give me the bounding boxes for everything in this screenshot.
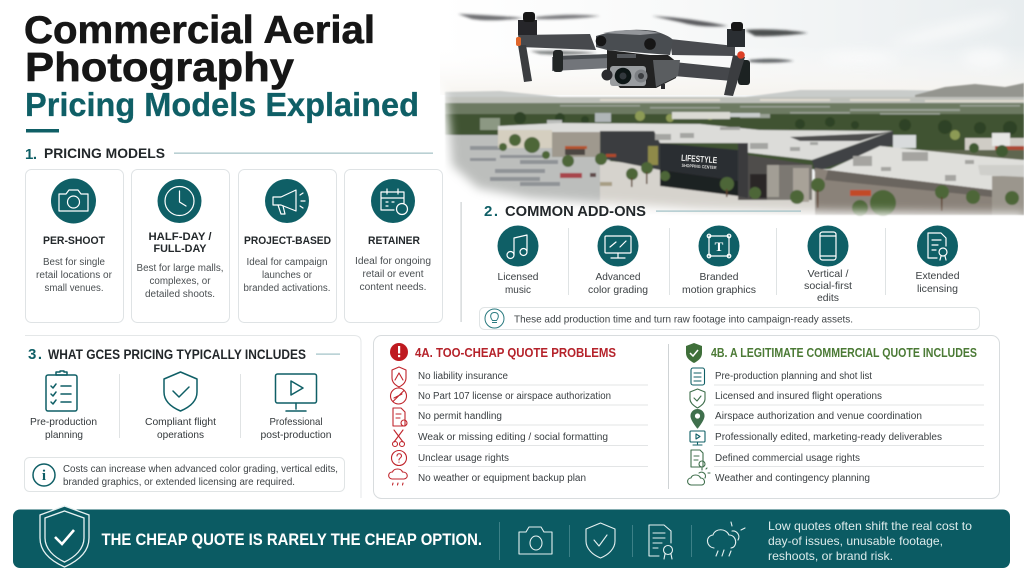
card: half-day / full-day: HALF-DAY / <box>148 231 212 243</box>
distant buildings <box>672 112 730 119</box>
column 4A: too-cheap quote problems: No liability insurance <box>418 371 508 382</box>
card: half-day / full-day: complexes, or <box>150 276 211 287</box>
column 4A: too-cheap quote problems: No Part 107 license or airspace authorization <box>418 391 611 402</box>
card: per-shoot: Best for single <box>43 257 105 268</box>
add-on: advanced color grading: color grading <box>588 284 648 296</box>
column 4B: legitimate quote includes: Airspace authorization and venue coordination <box>715 411 922 422</box>
add-on: licensed music <box>498 226 539 296</box>
column 4A: too-cheap quote problems: Weak or missing editing / social formatting <box>418 432 608 443</box>
photo sign text: SHOPPING CENTER <box>681 163 717 170</box>
icon: banner document <box>649 525 672 559</box>
heading: 3. what GCES pricing includes: WHAT GCES PRICING TYPICALLY INCLUDES <box>48 347 306 362</box>
item: compliant flight operations: operations <box>157 430 204 441</box>
heading: 2. common add-ons: COMMON ADD-ONS <box>505 204 646 220</box>
callout: cost note: i <box>42 468 46 484</box>
add-on: extended licensing: licensing <box>917 283 958 295</box>
icon: banner weather <box>707 522 745 556</box>
icon: banner shield <box>40 506 89 567</box>
icon: red alert <box>390 343 408 361</box>
card: per-shoot: PER-SHOOT <box>43 235 105 247</box>
icons: legitimate list <box>688 368 710 485</box>
icon: green shield check <box>686 343 702 363</box>
panel: what GCES pricing includes <box>24 336 361 498</box>
add-on: branded motion graphics: motion graphics <box>682 284 756 296</box>
callout: add-ons note: These add production time and turn raw footage into campaign-ready assets. <box>514 314 853 326</box>
add-on: extended licensing: Extended <box>916 270 960 282</box>
banner: cheap quote takeaway: THE CHEAP QUOTE IS RARELY THE CHEAP OPTION. <box>102 530 482 549</box>
panel: pricing models cards <box>26 170 442 322</box>
card: retainer: content needs. <box>360 282 426 293</box>
right building <box>828 146 1024 192</box>
card: retainer: retail or event <box>362 269 424 280</box>
text: banner explanation: Low quotes often shift the real cost to <box>768 519 972 533</box>
card: retainer: RETAINER <box>368 235 420 247</box>
text: banner explanation: reshoots, or brand risk. <box>768 549 893 563</box>
heading: 1. pricing models: PRICING MODELS <box>44 145 165 161</box>
panel: quote comparison <box>374 336 1000 498</box>
column 4A: too-cheap quote problems: No permit handling <box>418 411 502 422</box>
column 4B: legitimate quote includes: Professionally edited, marketing-ready deliverables <box>715 432 942 443</box>
column 4A: too-cheap quote problems <box>389 343 648 485</box>
heading: 3. what GCES pricing includes: 3. <box>28 346 42 363</box>
add-on: vertical social-first edits: edits <box>817 292 839 304</box>
card: half-day / full-day: FULL-DAY <box>154 243 207 255</box>
item: compliant flight operations: Compliant flight <box>145 417 216 428</box>
callout: cost note <box>24 458 344 492</box>
distant hills and city <box>445 90 1024 104</box>
card: retainer: Ideal for ongoing <box>355 256 431 267</box>
add-on: licensed music: music <box>505 284 531 296</box>
add-on: vertical social-first edits: Vertical / <box>808 268 849 280</box>
column 4B: legitimate quote includes: Weather and contingency planning <box>715 473 870 484</box>
title: Pricing Models Explained <box>25 86 419 123</box>
heading: 1. pricing models <box>25 145 433 163</box>
icon: banner camera <box>519 527 552 554</box>
column 4A: too-cheap quote problems: No weather or equipment backup plan <box>418 473 586 484</box>
add-on: advanced color grading <box>588 226 648 296</box>
add-on: extended licensing <box>916 226 960 295</box>
column 4B: legitimate quote includes: Pre-production planning and shot list <box>715 371 872 382</box>
callout: cost note: branded graphics, or extended licensing are required. <box>63 477 295 488</box>
column 4B: legitimate quote includes: Defined commercial usage rights <box>715 453 860 464</box>
drone <box>458 12 808 96</box>
icons: problem list <box>389 367 407 485</box>
card: per-shoot: small venues. <box>44 283 104 294</box>
card: project-based: launches or <box>262 270 313 281</box>
parking lot <box>445 135 610 215</box>
item: pre-production planning <box>30 371 97 441</box>
column 4B: legitimate quote includes <box>686 343 984 485</box>
column 4B: legitimate quote includes: 4B. A LEGITIMATE COMMERCIAL QUOTE INCLUDES <box>711 346 977 360</box>
icon: banner shield check <box>586 523 615 558</box>
callout: cost note: Costs can increase when advanced color grading, vertical edits, <box>63 464 338 475</box>
column 4A: too-cheap quote problems: Unclear usage rights <box>418 453 509 464</box>
photo sign text: LIFESTYLE <box>681 153 718 165</box>
card: half-day / full-day: detailed shoots. <box>145 289 215 300</box>
column 4A: too-cheap quote problems: 4A. TOO-CHEAP QUOTE PROBLEMS <box>415 346 616 360</box>
column 4B: legitimate quote includes: Licensed and insured flight operations <box>715 391 882 402</box>
title <box>24 9 419 123</box>
item: professional post-production: Professional <box>270 417 322 428</box>
card: project-based: branded activations. <box>244 283 330 294</box>
add-on: vertical social-first edits <box>804 226 852 304</box>
heading: 2. common add-ons <box>484 203 801 220</box>
text: banner explanation <box>768 519 972 563</box>
add-on: advanced color grading: Advanced <box>596 271 641 283</box>
banner: cheap quote takeaway <box>13 506 1010 568</box>
add-on: licensed music: Licensed <box>498 271 539 283</box>
card: per-shoot: retail locations or <box>36 270 113 281</box>
callout: add-ons note <box>480 308 980 330</box>
add-on: branded motion graphics: T <box>715 239 724 254</box>
item: compliant flight operations <box>145 372 216 441</box>
card: half-day / full-day <box>132 170 230 322</box>
add-on: vertical social-first edits: social-first <box>804 280 852 292</box>
card: per-shoot <box>26 170 124 322</box>
trees <box>499 134 1019 216</box>
heading: 2. common add-ons: 2. <box>484 203 498 220</box>
card: retainer <box>344 170 442 322</box>
title: Photography <box>25 44 294 90</box>
card: half-day / full-day: Best for large malls, <box>136 263 224 274</box>
card: project-based <box>238 170 336 322</box>
panel: common add-ons <box>460 202 980 330</box>
heading: 1. pricing models: 1. <box>25 146 37 163</box>
item: professional post-production <box>260 374 332 441</box>
card: project-based: Ideal for campaign <box>246 257 328 268</box>
card: project-based: PROJECT-BASED <box>244 235 331 247</box>
photo sign text <box>681 153 718 170</box>
item: pre-production planning: Pre-production <box>30 417 97 428</box>
item: professional post-production: post-production <box>260 430 332 441</box>
hero photo: shopping center aerial <box>425 0 1024 240</box>
text: banner explanation: day-of issues, unusable footage, <box>768 534 943 548</box>
title: Commercial Aerial <box>24 9 375 52</box>
item: pre-production planning: planning <box>45 430 83 441</box>
add-on: branded motion graphics <box>682 226 756 296</box>
main building roof <box>498 123 893 160</box>
add-on: branded motion graphics: Branded <box>700 271 739 283</box>
